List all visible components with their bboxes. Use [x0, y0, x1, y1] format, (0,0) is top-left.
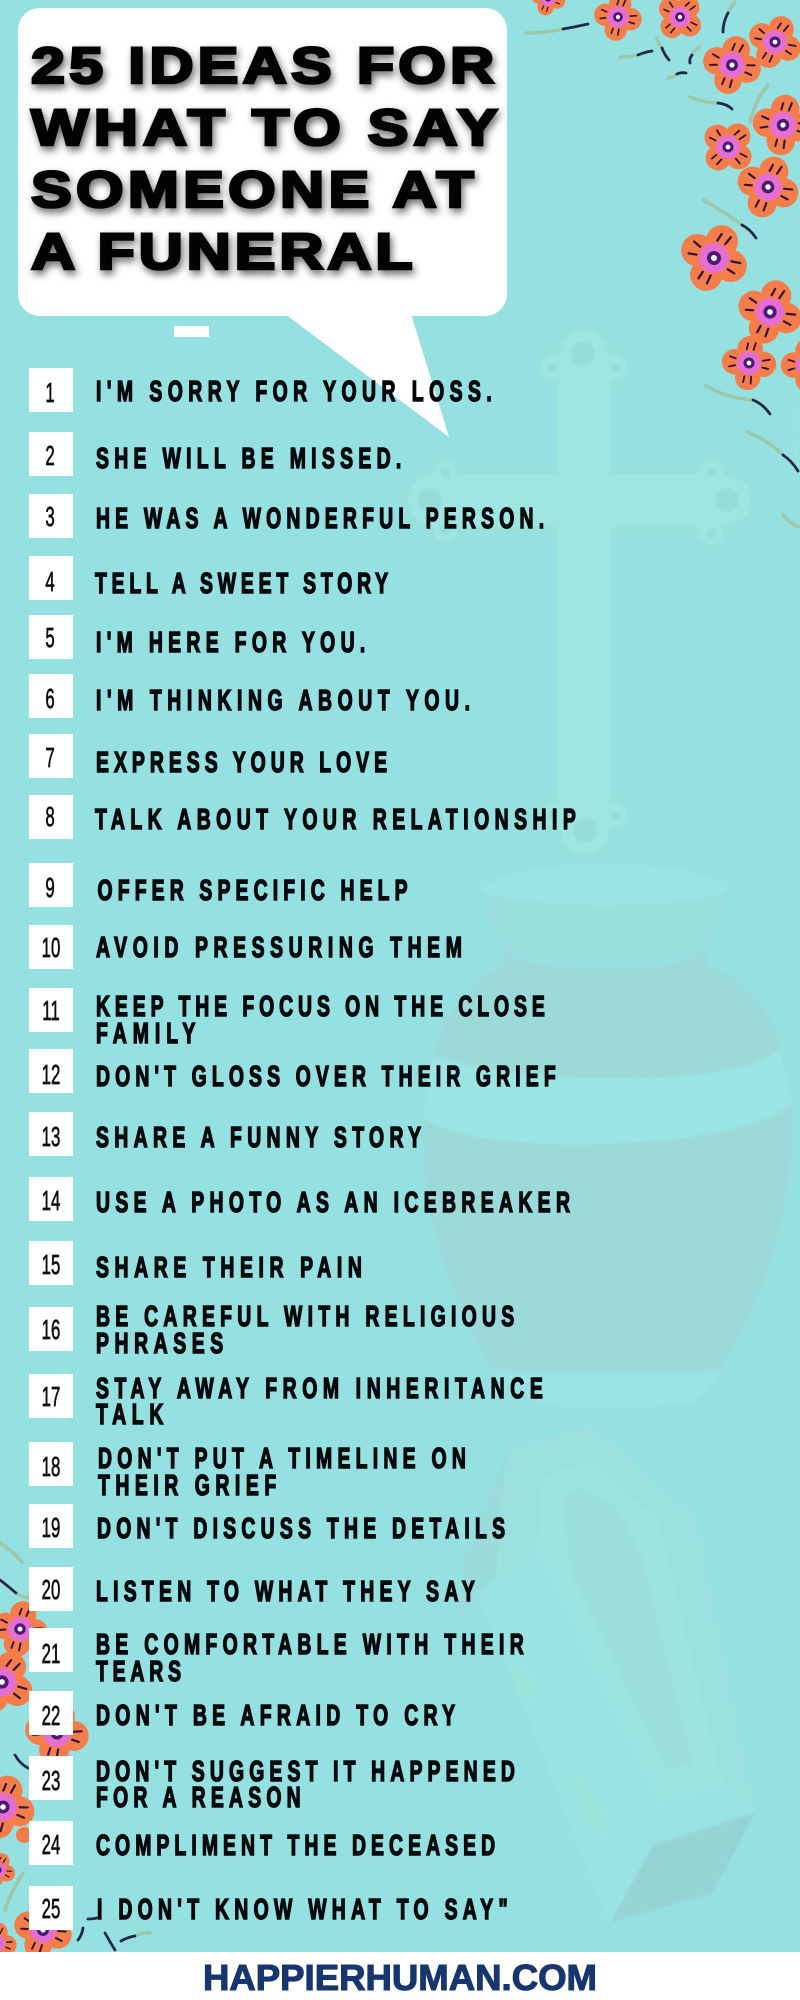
item 12: DON'T GLOSS OVER THEIR GRIEF: [96, 1061, 556, 1093]
speech bubble: [18, 8, 507, 437]
item 7: [29, 734, 387, 779]
item 11: KEEP THE FOCUS ON THE CLOSE: [96, 991, 545, 1023]
item 15: SHARE THEIR PAIN: [96, 1252, 362, 1284]
item 1: [29, 368, 492, 412]
item 18: DON'T PUT A TIMELINE ON: [98, 1443, 466, 1475]
item 3: [29, 494, 544, 538]
item 25: I DON'T KNOW WHAT TO SAY": [97, 1894, 508, 1926]
item 16: BE CAREFUL WITH RELIGIOUS: [96, 1301, 514, 1333]
item 3: 3: [45, 501, 55, 532]
footer bar: [0, 1952, 800, 2000]
item 3: HE WAS A WONDERFUL PERSON.: [96, 503, 544, 535]
title: A FUNERAL: [31, 223, 413, 280]
item 18: [29, 1442, 466, 1502]
item 8: 8: [45, 801, 55, 832]
item 23: DON'T SUGGEST IT HAPPENED: [96, 1756, 515, 1788]
item 20: [29, 1567, 475, 1611]
item 2: [29, 432, 401, 476]
title: [31, 37, 498, 280]
item 10: 10: [42, 932, 60, 963]
item 21: [29, 1628, 524, 1688]
item 13: SHARE A FUNNY STORY: [96, 1122, 421, 1154]
item 4: TELL A SWEET STORY: [95, 568, 388, 600]
item 11: [29, 988, 545, 1050]
footer text: HAPPIERHUMAN.COM: [203, 1957, 597, 1998]
item 21: TEARS: [96, 1656, 181, 1688]
item 19: 19: [42, 1512, 60, 1543]
item 2: SHE WILL BE MISSED.: [96, 443, 401, 475]
watermark: cross: [402, 324, 757, 860]
item 16: [29, 1301, 514, 1360]
item 23: FOR A REASON: [96, 1782, 301, 1814]
item 5: [29, 615, 365, 659]
item 9: [29, 863, 408, 907]
item 25: [29, 1886, 508, 1930]
item 17: [29, 1373, 543, 1431]
item 6: I'M THINKING ABOUT YOU.: [96, 685, 470, 717]
flowers: top right: [526, 0, 800, 527]
item 23: 23: [42, 1765, 60, 1796]
item 5: 5: [45, 622, 55, 653]
item 15: 15: [42, 1249, 60, 1280]
item 23: [29, 1756, 515, 1814]
item 10: [29, 925, 462, 969]
item 25: 25: [42, 1893, 60, 1924]
item 1: 1: [45, 377, 55, 408]
item 20: LISTEN TO WHAT THEY SAY: [96, 1576, 475, 1608]
item 14: USE A PHOTO AS AN ICEBREAKER: [96, 1187, 570, 1219]
item 22: [29, 1691, 455, 1735]
item 13: 13: [42, 1121, 60, 1152]
item 7: 7: [45, 742, 55, 773]
item 15: [29, 1241, 362, 1285]
item 11: 11: [42, 995, 60, 1026]
item 1: I'M SORRY FOR YOUR LOSS.: [96, 376, 492, 408]
item 12: [29, 1049, 556, 1093]
item 7: EXPRESS YOUR LOVE: [96, 747, 387, 779]
item 8: [29, 795, 576, 839]
item 22: 22: [42, 1700, 60, 1731]
item 12: 12: [42, 1059, 60, 1090]
item 24: 24: [42, 1829, 60, 1860]
item 14: 14: [42, 1185, 60, 1216]
item 16: 16: [42, 1314, 60, 1345]
leaves top right: [526, 2, 800, 527]
item 10: AVOID PRESSURING THEM: [96, 932, 462, 964]
item 24: COMPLIMENT THE DECEASED: [96, 1830, 495, 1862]
item 16: PHRASES: [96, 1328, 223, 1360]
item 13: [29, 1112, 421, 1156]
item 9: OFFER SPECIFIC HELP: [98, 875, 408, 907]
item 24: [29, 1821, 495, 1865]
item 9: 9: [45, 872, 55, 903]
item 8: TALK ABOUT YOUR RELATIONSHIP: [95, 804, 576, 836]
flowers: bottom left: [0, 1543, 150, 1967]
item 2: 2: [45, 440, 55, 471]
item 6: [29, 674, 470, 718]
item 4: 4: [45, 566, 55, 597]
item 17: STAY AWAY FROM INHERITANCE: [96, 1373, 543, 1405]
title: WHAT TO SAY: [31, 99, 498, 156]
item 19: DON'T DISCUSS THE DETAILS: [97, 1513, 505, 1545]
item 14: [29, 1177, 570, 1221]
item 11: FAMILY: [96, 1018, 195, 1050]
item 17: TALK: [96, 1399, 164, 1431]
item 4: [29, 556, 388, 600]
title: SOMEONE AT: [31, 161, 474, 218]
leaves bottom left: [0, 1543, 150, 1950]
item 18: THEIR GRIEF: [98, 1470, 276, 1502]
item 18: 18: [42, 1451, 60, 1482]
item 5: I'M HERE FOR YOU.: [96, 627, 365, 659]
item 19: [29, 1504, 505, 1548]
item 17: 17: [42, 1381, 60, 1412]
item 20: 20: [42, 1574, 60, 1605]
watermark: urn: [423, 864, 793, 1408]
item 22: DON'T BE AFRAID TO CRY: [96, 1700, 455, 1732]
watermark: coffin: [457, 1425, 755, 1923]
item 21: BE COMFORTABLE WITH THEIR: [96, 1629, 524, 1661]
title: 25 IDEAS FOR: [31, 37, 494, 94]
item 21: 21: [42, 1638, 60, 1669]
item 6: 6: [45, 683, 55, 714]
